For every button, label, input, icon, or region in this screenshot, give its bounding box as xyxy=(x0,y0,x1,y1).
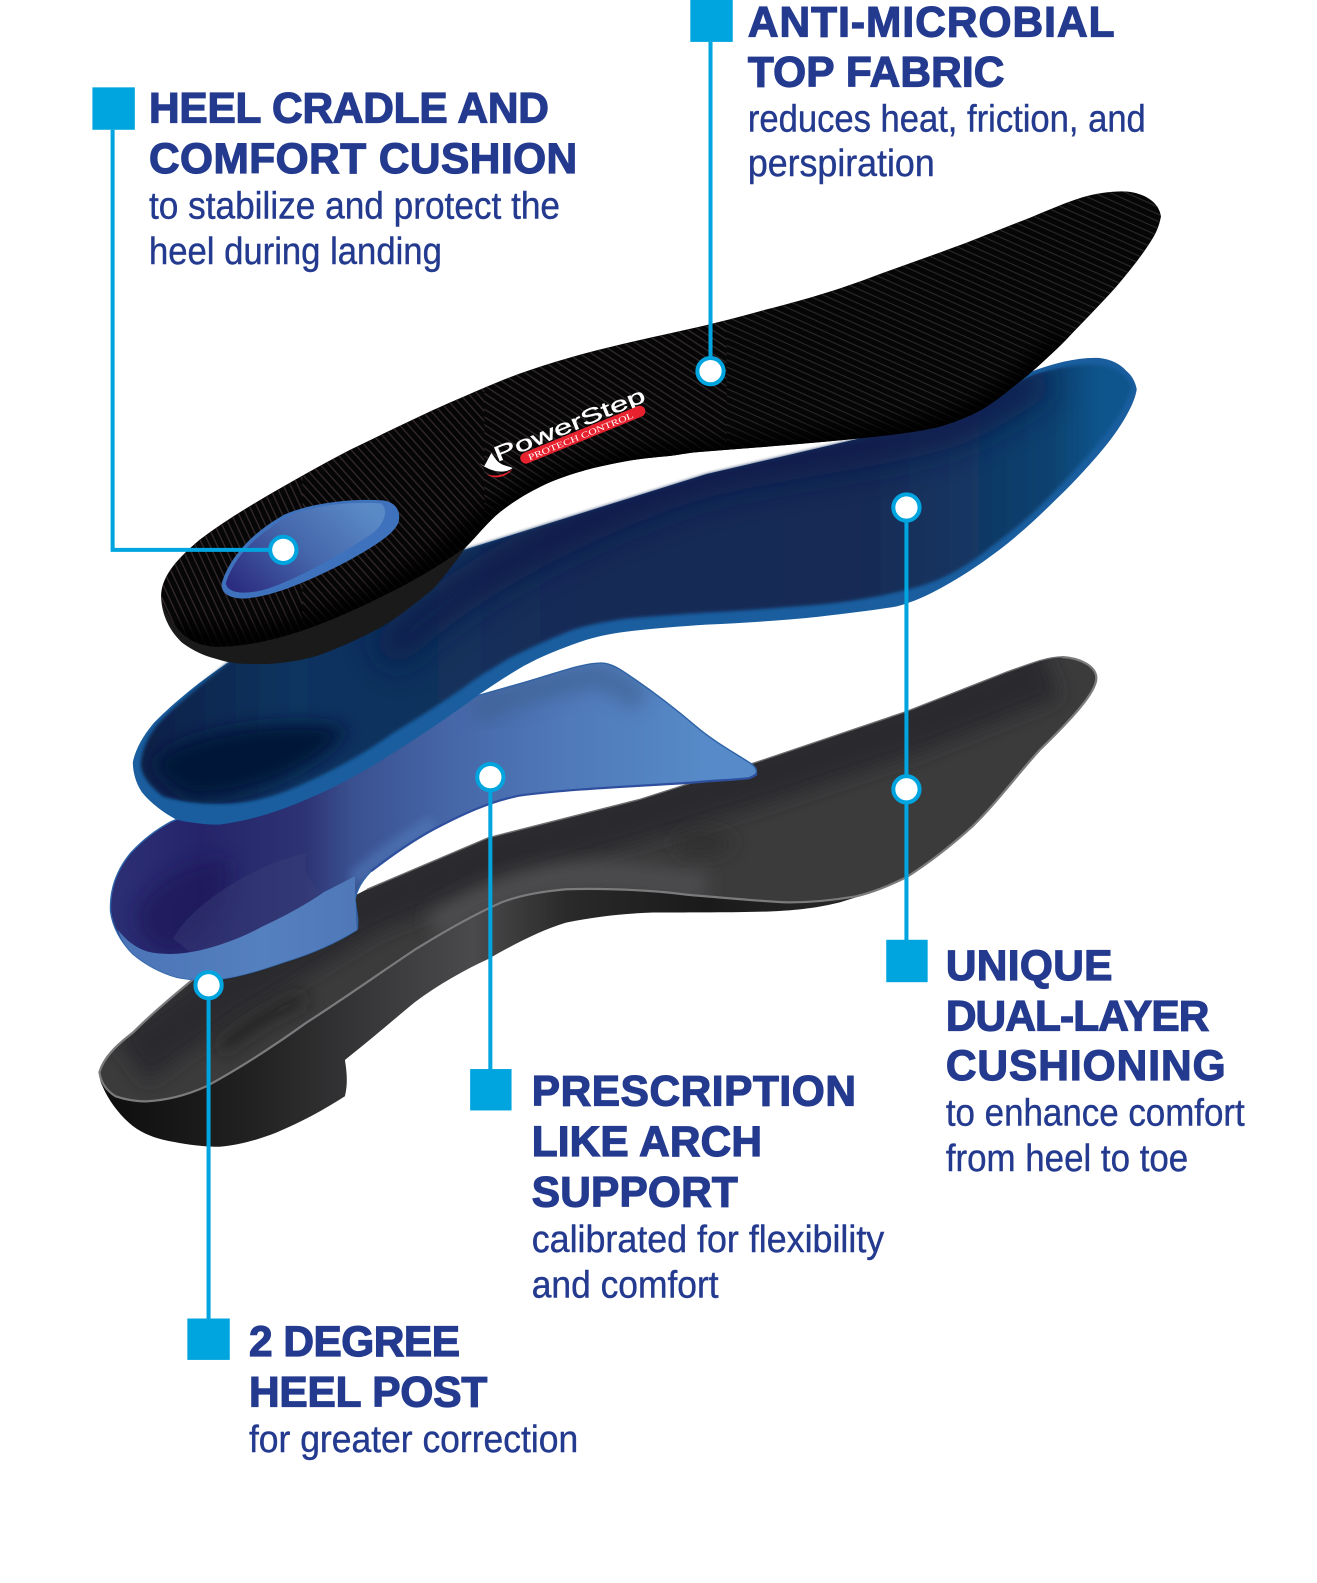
base top surface xyxy=(99,657,1096,1101)
fabric ribbing xyxy=(161,191,1161,635)
leader line xyxy=(904,519,908,941)
callout: unique dual-layer cushioning: from heel to toe xyxy=(946,1138,1188,1180)
leader line xyxy=(488,788,492,1070)
base underside xyxy=(99,868,873,1147)
marker dot xyxy=(697,358,724,384)
callout: heel cradle and comfort cushion: COMFORT CUSHION xyxy=(149,135,577,182)
insole layer: black anti-microbial top fabric xyxy=(151,181,1171,666)
logo wordmark: PowerStep xyxy=(491,384,649,467)
callout: anti-microbial top fabric: perspiration xyxy=(748,143,935,185)
logo shoe icon xyxy=(479,453,513,472)
description: calibrated for flexibility xyxy=(532,1219,884,1261)
insole layer: light blue arch support xyxy=(110,663,757,980)
logo wordmark: PROTECH CONTROL xyxy=(526,410,635,462)
leader line xyxy=(113,130,272,550)
callout: unique dual-layer cushioning: DUAL-LAYER xyxy=(946,993,1209,1040)
description: to stabilize and protect the xyxy=(149,186,560,228)
insole layer: blue dual-layer cushioning xyxy=(133,358,1137,825)
heel cup shadow xyxy=(136,858,229,954)
callout: anti-microbial top fabric: TOP FABRIC xyxy=(748,48,1004,95)
marker dot upper xyxy=(893,494,920,521)
heading: 2 DEGREE xyxy=(249,1318,460,1365)
heading: HEEL CRADLE AND xyxy=(149,85,549,132)
top layer fabric surface xyxy=(161,191,1161,647)
callout: 2 degree heel post xyxy=(187,972,578,1461)
callout: heel cradle and comfort cushion xyxy=(92,85,577,563)
base top edge highlight xyxy=(367,657,1062,889)
marker dot xyxy=(195,972,222,998)
marker square xyxy=(690,0,733,42)
callout: unique dual-layer cushioning: CUSHIONING xyxy=(946,1042,1226,1089)
description: for greater correction xyxy=(249,1419,578,1461)
heel cup insert xyxy=(174,875,249,952)
callout: heel cradle and comfort cushion: heel during landing xyxy=(149,231,442,273)
leader line xyxy=(709,42,713,360)
cushion shadow below top layer xyxy=(383,375,1045,656)
heel cup rim xyxy=(118,876,357,980)
top layer side rim xyxy=(161,547,466,664)
cushion heel shadow xyxy=(156,724,348,797)
heading: PRESCRIPTION xyxy=(532,1067,856,1114)
brand logo: PowerStep xyxy=(479,384,652,477)
marker square xyxy=(187,1319,230,1360)
arch lower light band xyxy=(353,823,434,880)
cushion rim xyxy=(133,358,1137,825)
callout: unique dual-layer cushioning xyxy=(886,494,1245,1180)
callout: prescription like arch support xyxy=(470,764,884,1306)
cushion surface xyxy=(141,365,1132,804)
marker square xyxy=(886,940,928,982)
base rim highlight line xyxy=(99,657,1096,1101)
callout: prescription like arch support: SUPPORT xyxy=(532,1168,738,1215)
arch top shading xyxy=(474,676,642,712)
callout: 2 degree heel post: HEEL POST xyxy=(249,1368,487,1415)
callout: prescription like arch support: and comfort xyxy=(532,1264,719,1306)
marker square xyxy=(92,87,135,130)
description: reduces heat, friction, and xyxy=(748,98,1146,140)
logo swoosh xyxy=(486,469,513,477)
leader line xyxy=(207,996,211,1319)
logo wordmark xyxy=(491,384,652,474)
marker dot xyxy=(477,764,503,790)
description: to enhance comfort xyxy=(946,1093,1245,1135)
marker dot lower xyxy=(893,776,920,802)
arch bottom edge xyxy=(371,774,757,871)
marker square xyxy=(470,1069,512,1110)
marker dot xyxy=(270,537,296,563)
heel cradle pad xyxy=(222,500,399,599)
callout: anti-microbial top fabric xyxy=(690,0,1146,384)
heading: UNIQUE xyxy=(946,942,1112,989)
callout: prescription like arch support: LIKE ARCH xyxy=(532,1118,762,1165)
base surface shading xyxy=(131,671,1050,1060)
insole layer: dark heel post base xyxy=(99,657,1096,1147)
